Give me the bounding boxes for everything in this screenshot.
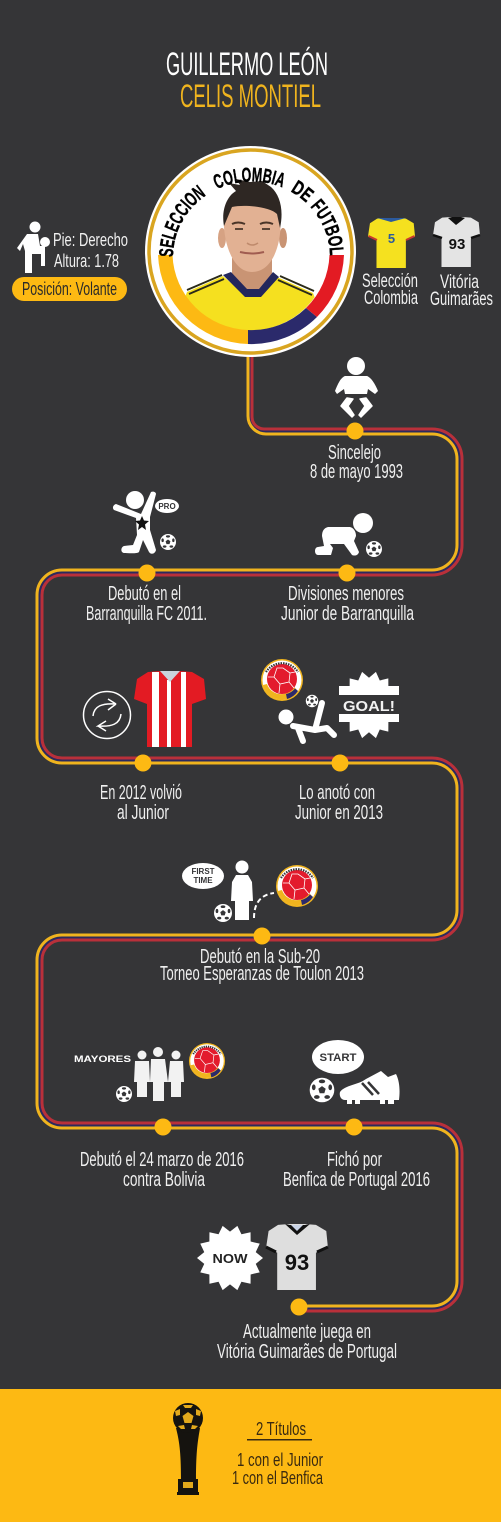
milestone: under-20 debut: TIME bbox=[193, 876, 213, 885]
milestone: current club: Vitória Guimarães de Portugal bbox=[217, 1341, 397, 1363]
milestone: senior debut: Debutó el 24 marzo de 2016 bbox=[80, 1149, 244, 1171]
player portrait badge bbox=[145, 146, 356, 357]
flag ring: red bbox=[306, 255, 344, 317]
jersey: Colombia: Colombia bbox=[364, 288, 418, 309]
milestone: birth bbox=[310, 357, 403, 483]
timeline dots bbox=[134, 422, 364, 1316]
icon: now burst: NOW bbox=[212, 1251, 248, 1266]
milestone: senior debut: MAYORES bbox=[74, 1054, 131, 1065]
icon: goal burst bbox=[336, 672, 402, 738]
icon: grey jersey bbox=[266, 1224, 328, 1290]
icon: now burst bbox=[197, 1226, 263, 1290]
title: CELIS MONTIEL bbox=[180, 78, 321, 114]
milestone: Benfica bbox=[283, 1040, 430, 1191]
milestone: senior debut: contra Bolivia bbox=[123, 1169, 206, 1191]
milestone: under-20 debut: FIRST bbox=[191, 867, 215, 876]
jersey: Colombia: 5 bbox=[388, 231, 395, 246]
icon: red striped jersey bbox=[134, 671, 206, 747]
icon: standing person bbox=[231, 860, 253, 920]
milestone: under-20 debut bbox=[160, 860, 364, 985]
milestone: youth divisions: Divisiones menores bbox=[288, 583, 404, 605]
milestone: goal with Junior bbox=[261, 659, 402, 824]
milestone: birth: 8 de mayo 1993 bbox=[310, 461, 403, 483]
milestone: youth divisions: Junior de Barranquilla bbox=[281, 603, 415, 625]
milestone: senior debut bbox=[74, 1043, 244, 1191]
title: GUILLERMO LEÓN bbox=[166, 46, 328, 82]
jersey: Colombia bbox=[362, 218, 418, 309]
milestone: under-20 debut: Debutó en la Sub-20 bbox=[200, 946, 320, 968]
icon: trophy bbox=[173, 1403, 203, 1495]
icon: celebrating player bbox=[113, 491, 156, 554]
icon: goal burst: GOAL! bbox=[343, 699, 395, 715]
milestone: birth: Sincelejo bbox=[328, 442, 381, 464]
milestone: return to Junior: En 2012 volvió bbox=[100, 782, 182, 804]
milestone: professional debut: PRO bbox=[158, 502, 176, 511]
curved badge text: SELECCION COLOMBIA DE FUTBOL bbox=[159, 168, 344, 257]
player stats: Altura: 1.78 bbox=[54, 251, 119, 271]
milestone: Benfica: Benfica de Portugal 2016 bbox=[283, 1169, 430, 1191]
milestone: professional debut bbox=[86, 491, 207, 625]
milestone: current club: Actualmente juega en bbox=[243, 1321, 371, 1343]
milestone: youth divisions bbox=[281, 513, 415, 625]
milestone: Benfica: START bbox=[320, 1052, 357, 1064]
milestone: Benfica: Fichó por bbox=[327, 1149, 382, 1171]
jersey: Vitória Guimarães bbox=[430, 217, 493, 310]
flag ring: yellow bbox=[158, 255, 248, 344]
position pill bbox=[12, 277, 127, 301]
jersey: Vitória Guimarães: 93 bbox=[449, 236, 465, 253]
icon: crawling baby bbox=[315, 513, 373, 556]
milestone: current club bbox=[197, 1224, 397, 1363]
milestone: goal with Junior: Lo anotó con bbox=[299, 782, 375, 804]
milestone: goal with Junior: Junior en 2013 bbox=[295, 802, 383, 824]
icon: transfer arrows bbox=[84, 692, 130, 738]
jersey: Colombia: Selección bbox=[362, 271, 418, 292]
title bbox=[166, 46, 328, 114]
icon: bicycle kick bbox=[282, 703, 334, 741]
flag ring: navy bbox=[248, 308, 317, 344]
timeline path bbox=[37, 350, 462, 1311]
panel: titles footer: 1 con el Junior bbox=[237, 1450, 323, 1470]
icon: grey jersey: 93 bbox=[285, 1250, 309, 1275]
player stats: Posición: Volante bbox=[22, 279, 117, 299]
player stats: Pie: Derecho bbox=[53, 230, 128, 250]
player stats bbox=[12, 222, 128, 301]
icon: baby bbox=[335, 357, 378, 417]
milestone: return to Junior: al Junior bbox=[117, 802, 169, 824]
icon: player kicking ball bbox=[17, 222, 50, 273]
panel: titles footer bbox=[0, 1389, 501, 1522]
panel: titles footer: 2 Títulos bbox=[256, 1419, 306, 1439]
portrait photo bbox=[186, 179, 315, 330]
milestone: under-20 debut: Torneo Esperanzas de Toulon 2013 bbox=[160, 963, 364, 985]
icon: three players bbox=[134, 1047, 184, 1101]
jersey: Vitória Guimarães: Vitória bbox=[440, 272, 479, 293]
milestone: professional debut: Barranquilla FC 2011. bbox=[86, 603, 207, 625]
icon: boot bbox=[340, 1071, 400, 1104]
milestone: return to Junior bbox=[84, 671, 206, 824]
milestone: professional debut: Debutó en el bbox=[108, 583, 181, 605]
panel: titles footer: 1 con el Benfica bbox=[232, 1468, 324, 1488]
